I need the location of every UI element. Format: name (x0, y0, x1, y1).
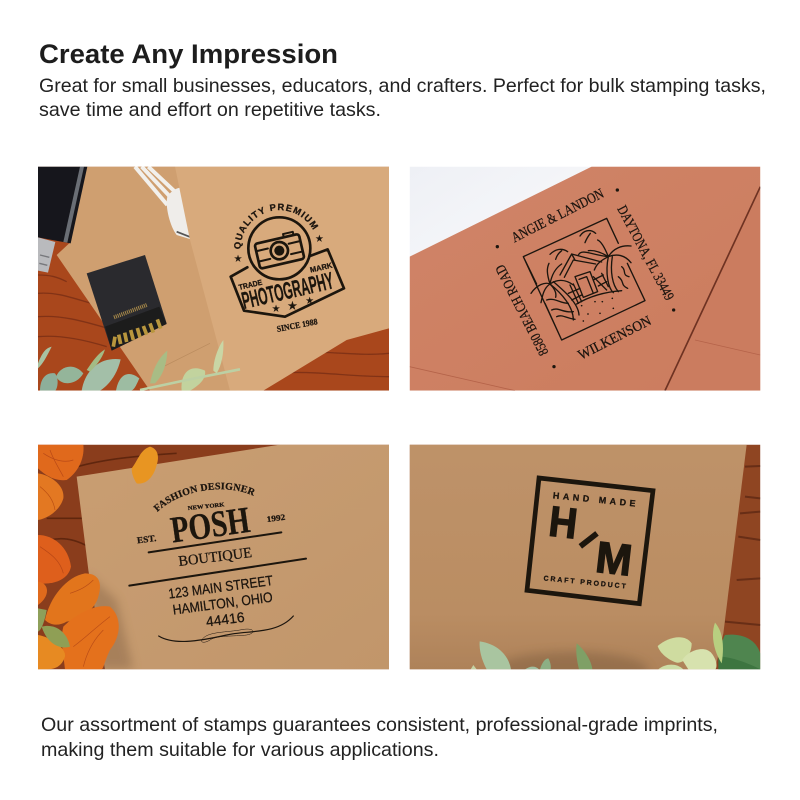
stamp: quality premium photography: ★ (234, 254, 242, 264)
stamp: hand made craft product: M (593, 533, 635, 586)
stamp text: DAYTONA, FL 33449 (613, 203, 677, 303)
back envelope (57, 167, 237, 391)
stamp: hand made craft product: HAND MADE (552, 490, 638, 509)
stamp: hand made craft product: H (547, 498, 580, 548)
closing text (41, 714, 718, 761)
photo: photography stamp on kraft envelope (38, 166, 389, 391)
stamp frame (523, 218, 645, 340)
stamp: quality premium photography: QUALITY PREMIUM (234, 204, 318, 249)
stamp corner dots (496, 188, 675, 368)
stamp: fashion designer posh boutique: 44416 (205, 609, 246, 630)
stamp: fashion designer posh boutique (128, 482, 307, 642)
closing text: making them suitable for various applications. (41, 739, 439, 761)
envelope (410, 445, 747, 669)
soft leaf shadow (508, 650, 648, 670)
stamp: quality premium photography: ★ (306, 296, 314, 306)
orange petals (38, 445, 158, 669)
stamp: fashion designer posh boutique: POSH (168, 500, 252, 552)
camera icon (254, 231, 304, 269)
stamp text: ANGIE & LANDON (509, 186, 607, 246)
stamp: fashion designer posh boutique: BOUTIQUE (178, 545, 253, 570)
right flap (760, 188, 761, 390)
photo: posh boutique stamp on kraft envelope (38, 444, 389, 670)
stamp: quality premium photography (229, 204, 346, 332)
intro text (39, 75, 766, 121)
usb connector (38, 237, 55, 273)
title: Create Any Impression (39, 39, 338, 69)
photo: house address stamp on salmon envelope (410, 167, 760, 391)
photo: hand made stamp on kraft envelope (410, 445, 760, 688)
front envelope (175, 167, 389, 391)
stamp: fashion designer posh boutique: 1992 (266, 513, 286, 524)
sd card (87, 255, 167, 351)
intro text: save time and effort on repetitive tasks. (39, 99, 381, 121)
envelope (77, 445, 389, 669)
stamp text (493, 186, 677, 364)
envelope shadow (93, 582, 134, 670)
stamp: quality premium photography: PHOTOGRAPHY (239, 268, 336, 315)
stamp: hand made craft product (527, 478, 653, 604)
stamp: quality premium photography: SINCE 1988 (276, 316, 319, 334)
leaves (471, 623, 760, 669)
stamp: quality premium photography: ★ (287, 299, 297, 313)
stamp: hand made craft product: CRAFT PRODUCT (543, 575, 627, 591)
stamp: fashion designer posh boutique: HAMILTON, OHIO (172, 589, 274, 618)
stamp: quality premium photography: ★ (315, 234, 323, 244)
stamp: quality premium photography: ★ (272, 305, 280, 315)
stamp: fashion designer posh boutique: FASHION DESIGNER (153, 482, 254, 512)
stamp: quality premium photography: TRADE (238, 278, 263, 292)
stamp: fashion designer posh boutique: EST. (136, 533, 157, 545)
black device (38, 167, 87, 243)
stamp: fashion designer posh boutique: NEW YORK (188, 502, 225, 512)
stamp text: WILKENSON (576, 313, 655, 364)
closing text: Our assortment of stamps guarantees consistent, professional-grade imprints, (41, 714, 718, 736)
stamp text: 8580 BEACH ROAD (493, 262, 552, 358)
leaves (38, 340, 240, 391)
house and palm trees (531, 231, 631, 320)
intro text: Great for small businesses, educators, and crafters. Perfect for bulk stamping tasks, (39, 75, 766, 97)
flourish (159, 616, 293, 641)
stamp: fashion designer posh boutique: 123 MAIN STREET (167, 572, 274, 602)
stamp: quality premium photography: MARK (309, 261, 334, 275)
white cable (135, 167, 191, 239)
